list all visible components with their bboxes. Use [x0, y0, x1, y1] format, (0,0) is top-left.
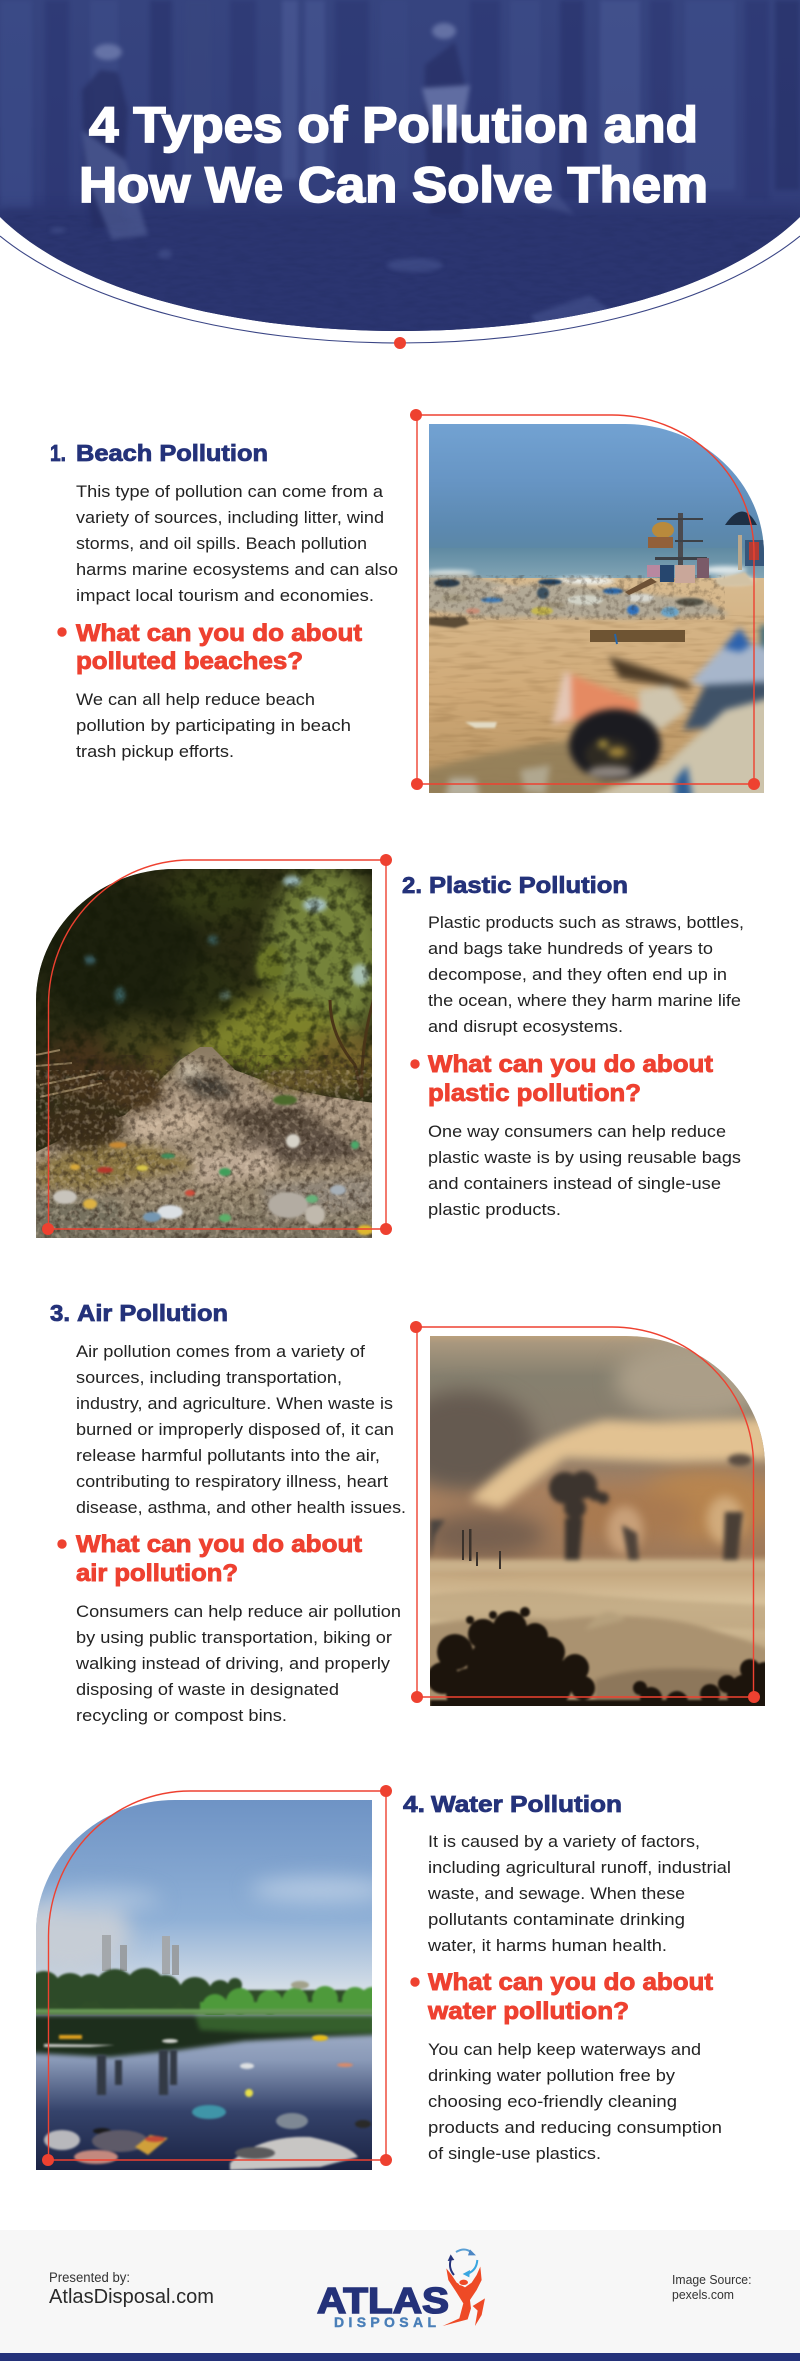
subheading: What can you do about — [428, 1051, 713, 1078]
title — [79, 97, 708, 213]
solution text — [75, 1603, 401, 1725]
bullet — [410, 1059, 420, 1069]
image source: Image Source: — [672, 2272, 752, 2287]
photo: littered beach — [425, 420, 770, 803]
subheading: plastic pollution? — [428, 1080, 641, 1107]
body text: Air pollution comes from a variety of — [76, 1343, 365, 1361]
driftwood — [590, 630, 685, 642]
frame dots — [410, 1321, 760, 1703]
body text: storms, and oil spills. Beach pollution — [76, 535, 367, 553]
presented by: Presented by: — [49, 2270, 130, 2285]
logo: Atlas Disposal: DISPOSAL — [334, 2314, 436, 2330]
body text: Plastic products such as straws, bottles, — [428, 914, 744, 932]
solution text — [76, 691, 351, 761]
solution text: disposing of waste in designated — [76, 1681, 339, 1699]
body text: pollutants contaminate drinking — [428, 1911, 685, 1929]
solution text: trash pickup efforts. — [76, 743, 234, 761]
frame dots — [42, 854, 392, 1235]
body text: release harmful pollutants into the air, — [76, 1447, 380, 1465]
subheading — [427, 1969, 713, 2025]
body text — [76, 1343, 406, 1517]
section heading: 4. — [403, 1791, 425, 1817]
body text: harms marine ecosystems and can also — [76, 561, 398, 579]
image source — [672, 2272, 752, 2302]
solution text: Consumers can help reduce air pollution — [76, 1603, 401, 1621]
section heading: Water Pollution — [431, 1791, 622, 1817]
solution text: walking instead of driving, and properly — [75, 1655, 391, 1673]
body text: contributing to respiratory illness, heart — [76, 1473, 388, 1491]
icon: figure holding recycling globe — [443, 2249, 485, 2326]
section heading: 1. — [50, 440, 66, 466]
section heading: Air Pollution — [77, 1300, 228, 1326]
solution text: One way consumers can help reduce — [428, 1123, 726, 1141]
hazy hills — [430, 1590, 765, 1706]
section 1: beach pollution — [50, 409, 770, 803]
presented by — [49, 2270, 214, 2308]
body text: It is caused by a variety of factors, — [428, 1833, 700, 1851]
body text — [428, 914, 744, 1036]
solution text: by using public transportation, biking or — [76, 1629, 393, 1647]
logo: Atlas Disposal — [317, 2249, 485, 2330]
curved outline under the banner — [0, 236, 800, 343]
body text: water, it harms human health. — [427, 1937, 667, 1955]
subheading: What can you do about — [76, 1531, 362, 1558]
subheading: What can you do about — [76, 620, 362, 647]
bullet — [57, 1539, 67, 1549]
subheading — [428, 1051, 713, 1107]
solution text: plastic products. — [428, 1201, 561, 1219]
solution text — [428, 1123, 741, 1219]
body text: including agricultural runoff, industrial — [428, 1859, 731, 1877]
solution text: of single-use plastics. — [428, 2145, 601, 2163]
body text: decompose, and they often end up in — [428, 966, 727, 984]
chimneys — [462, 1529, 501, 1569]
solution text: recycling or compost bins. — [76, 1707, 287, 1725]
body text: This type of pollution can come from a — [76, 483, 384, 501]
body text: burned or improperly disposed of, it can — [76, 1421, 394, 1439]
solution text: plastic waste is by using reusable bags — [428, 1149, 741, 1167]
red dot — [394, 337, 406, 349]
body text — [76, 483, 398, 605]
solution text: You can help keep waterways and — [428, 2041, 701, 2059]
body text: and bags take hundreds of years to — [428, 940, 713, 958]
photo: polluted lake with industrial stacks — [36, 1800, 372, 2170]
bullet — [410, 1977, 420, 1987]
branches — [330, 995, 375, 1097]
stack reflections — [97, 2050, 177, 2095]
silhouetted trees — [430, 1606, 765, 1706]
solution text: We can all help reduce beach — [76, 691, 315, 709]
subheading: air pollution? — [76, 1560, 238, 1587]
footer — [0, 2230, 800, 2361]
header photo: volunteers collecting litter in a forest, navy duotone — [0, 0, 800, 345]
body text — [427, 1833, 731, 1955]
photo frame outline — [416, 415, 754, 784]
dark smoke plumes — [425, 1454, 770, 1572]
title: How We Can Solve Them — [79, 157, 708, 213]
litter on the ground — [50, 227, 612, 328]
blurred foreground debris — [425, 625, 770, 800]
tree line — [36, 1966, 372, 2015]
frame dots — [42, 1785, 392, 2166]
solution text: and containers instead of single-use — [428, 1175, 721, 1193]
section 2: plastic pollution — [30, 854, 744, 1250]
image source: pexels.com — [672, 2287, 734, 2302]
section 3: air pollution — [50, 1300, 792, 1725]
water — [30, 2015, 375, 2175]
subheading: polluted beaches? — [76, 648, 303, 675]
subheading — [76, 1531, 362, 1587]
body text: and disrupt ecosystems. — [428, 1018, 623, 1036]
frame dots — [410, 409, 760, 790]
photo frame outline — [48, 860, 386, 1229]
volunteer right — [422, 23, 575, 215]
body text: variety of sources, including litter, wind — [76, 509, 384, 527]
photo: plastic-strewn forest path — [30, 865, 385, 1250]
solution text: products and reducing consumption — [428, 2119, 722, 2137]
bullet — [57, 627, 67, 637]
floating trash — [44, 2035, 371, 2170]
trash band — [425, 575, 730, 619]
body text: waste, and sewage. When these — [427, 1885, 685, 1903]
title: 4 Types of Pollution and — [89, 97, 698, 153]
photo frame outline — [48, 1791, 386, 2160]
solution text: choosing eco-friendly cleaning — [428, 2093, 677, 2111]
individual plastic items — [53, 1095, 373, 1235]
section heading: 3. — [50, 1300, 70, 1326]
section heading: Beach Pollution — [76, 440, 268, 466]
section heading: Plastic Pollution — [429, 872, 628, 898]
photo: smokestacks above morning haze — [430, 1336, 765, 1706]
section 4: water pollution — [10, 1785, 731, 2175]
body text: sources, including transportation, — [76, 1369, 342, 1387]
subheading — [76, 620, 362, 675]
presented by: AtlasDisposal.com — [49, 2286, 214, 2308]
logo: Atlas Disposal: ATLAS — [317, 2280, 449, 2321]
solution text — [428, 2041, 722, 2163]
solution text: pollution by participating in beach — [76, 717, 351, 735]
smokestacks — [102, 1935, 179, 1975]
trash-covered ground — [30, 1047, 375, 1245]
solution text: drinking water pollution free by — [428, 2067, 676, 2085]
body text: industry, and agriculture. When waste is — [76, 1395, 393, 1413]
subheading: What can you do about — [428, 1969, 713, 1996]
body text: impact local tourism and economies. — [76, 587, 374, 605]
photo frame outline — [416, 1327, 754, 1697]
subheading: water pollution? — [427, 1998, 629, 2025]
header banner with title — [0, 0, 800, 349]
volunteer left — [82, 44, 148, 240]
body text: the ocean, where they harm marine life — [428, 992, 741, 1010]
tree reflection — [30, 2015, 375, 2057]
body text: disease, asthma, and other health issues. — [76, 1499, 406, 1517]
section heading: 2. — [402, 872, 422, 898]
vendor stand — [625, 512, 765, 595]
